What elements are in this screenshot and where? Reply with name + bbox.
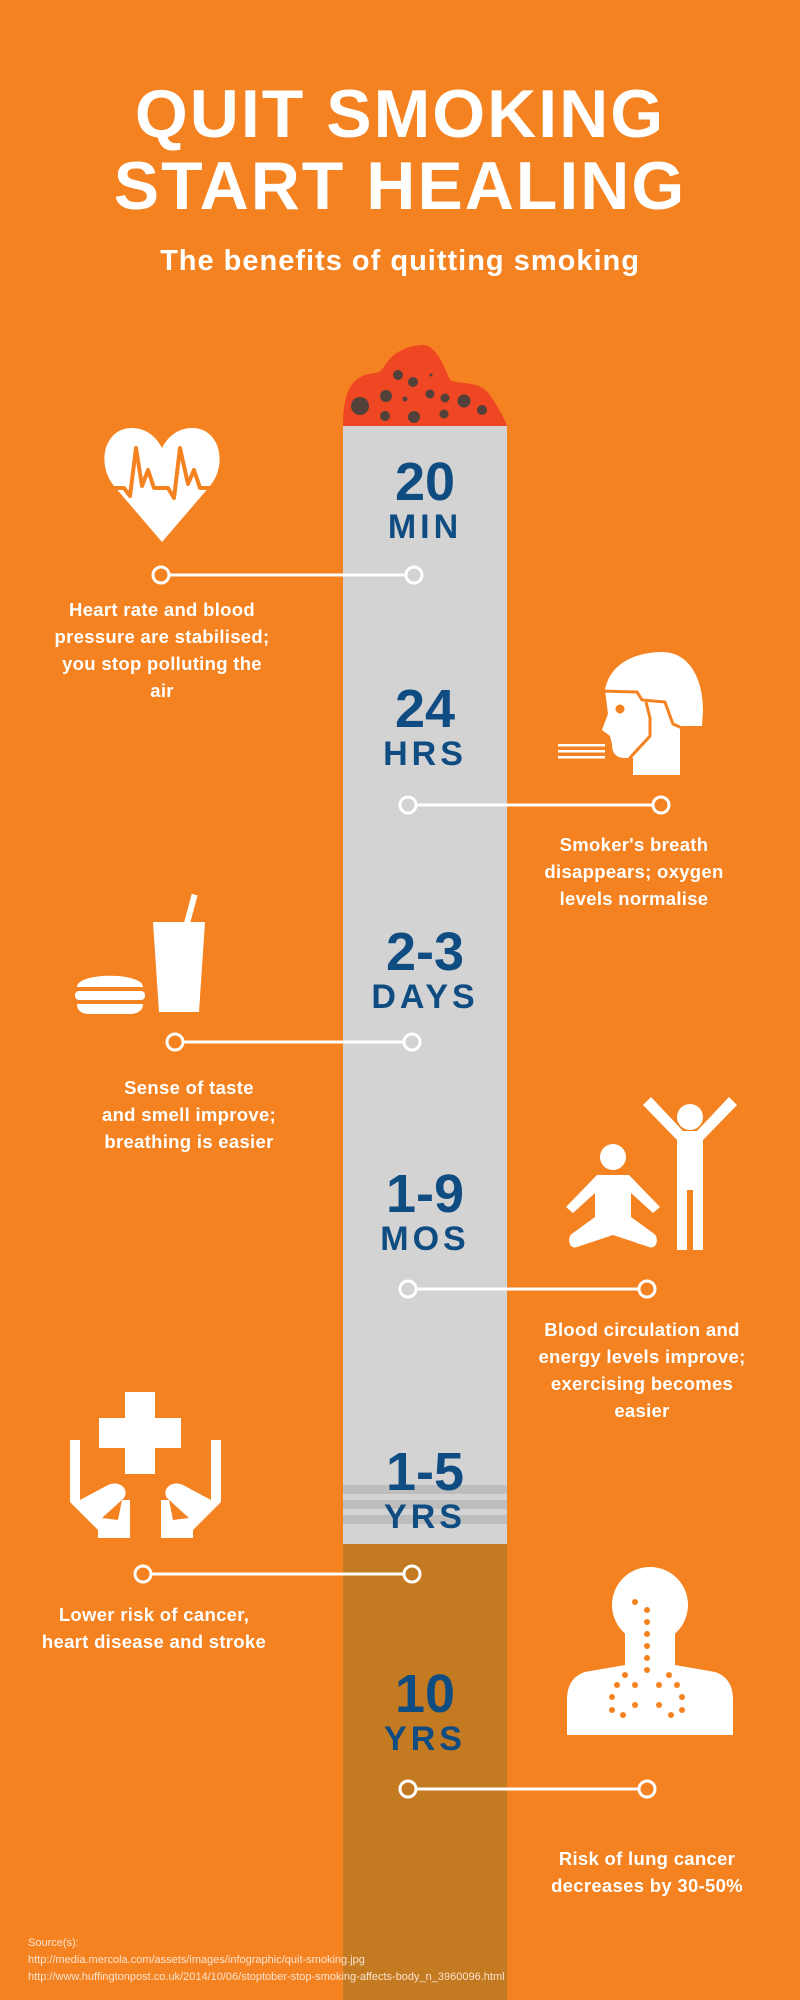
text: taste: [102, 1077, 276, 1152]
text: cancer risk: heart disease and stroke: [42, 1631, 266, 1652]
icon: exercise people: [566, 1097, 737, 1250]
text: breath: Smoker's breath: [560, 834, 708, 855]
text: circulation: exercising becomes: [551, 1373, 733, 1394]
time: 1-9 MOS: [380, 1164, 470, 1258]
ash tip: [343, 345, 507, 426]
text: lung cancer: Risk of lung cancer: [559, 1848, 735, 1869]
text: lung cancer: [551, 1848, 743, 1896]
time: 1-9 MOS: MOS: [380, 1220, 470, 1258]
time: 2-3 DAYS: DAYS: [371, 978, 479, 1016]
time: 2-3 DAYS: 2-3: [386, 922, 464, 982]
text: breath: [544, 834, 724, 909]
time: 1-5 YRS: YRS: [384, 1498, 466, 1536]
text: lung cancer: decreases by 30-50%: [551, 1875, 743, 1896]
title: START HEALING: [114, 148, 686, 224]
text: breath: disappears; oxygen: [544, 861, 724, 882]
time: 20 MIN: MIN: [388, 508, 462, 546]
time: 24 HRS: 24: [395, 679, 455, 739]
text: heart rate: you stop polluting the: [62, 653, 262, 674]
text: heart rate: Heart rate and blood: [69, 599, 255, 620]
time: 20 MIN: 20: [395, 452, 455, 512]
time: 10 YRS: YRS: [384, 1720, 466, 1758]
time: 1-5 YRS: [384, 1442, 466, 1536]
text: cancer risk: [42, 1604, 266, 1652]
sources: Source(s):: [28, 1937, 79, 1949]
text: circulation: easier: [614, 1400, 670, 1421]
time: 10 YRS: 10: [395, 1664, 455, 1724]
connector lines: [135, 567, 669, 1797]
icon: heart: [104, 428, 220, 542]
time: 24 HRS: [383, 679, 467, 773]
title: QUIT SMOKING: [135, 76, 665, 152]
text: circulation: Blood circulation and: [544, 1319, 740, 1340]
icon: medical hands: [70, 1392, 221, 1538]
text: cancer risk: Lower risk of cancer,: [59, 1604, 249, 1625]
sources: [28, 1937, 505, 1983]
icon: head breathing: [558, 652, 703, 775]
sources: http://media.mercola.com/assets/images/infographic/quit-smoking.jpg: [28, 1954, 365, 1966]
time: 24 HRS: HRS: [383, 735, 467, 773]
time: 1-9 MOS: 1-9: [386, 1164, 464, 1224]
title: [114, 76, 686, 224]
text: taste: Sense of taste: [124, 1077, 254, 1098]
icon: burger and drink: [75, 894, 205, 1014]
cigarette body: [343, 426, 507, 1544]
text: taste: and smell improve;: [102, 1104, 276, 1125]
text: circulation: energy levels improve;: [538, 1346, 746, 1367]
text: breath: levels normalise: [560, 888, 708, 909]
text: taste: breathing is easier: [104, 1131, 274, 1152]
time: 20 MIN: [388, 452, 462, 546]
time: 2-3 DAYS: [371, 922, 479, 1016]
text: heart rate: air: [150, 680, 174, 701]
subtitle: The benefits of quitting smoking: [160, 245, 640, 277]
text: heart rate: pressure are stabilised;: [55, 626, 269, 647]
time: 1-5 YRS: 1-5: [386, 1442, 464, 1502]
icon: lungs body: [567, 1567, 733, 1735]
text: circulation: [538, 1319, 746, 1421]
text: heart rate: [55, 599, 269, 701]
time: 10 YRS: [384, 1664, 466, 1758]
sources: http://www.huffingtonpost.co.uk/2014/10/06/stoptober-stop-smoking-affects-body_n_3960096.html: [28, 1971, 505, 1983]
